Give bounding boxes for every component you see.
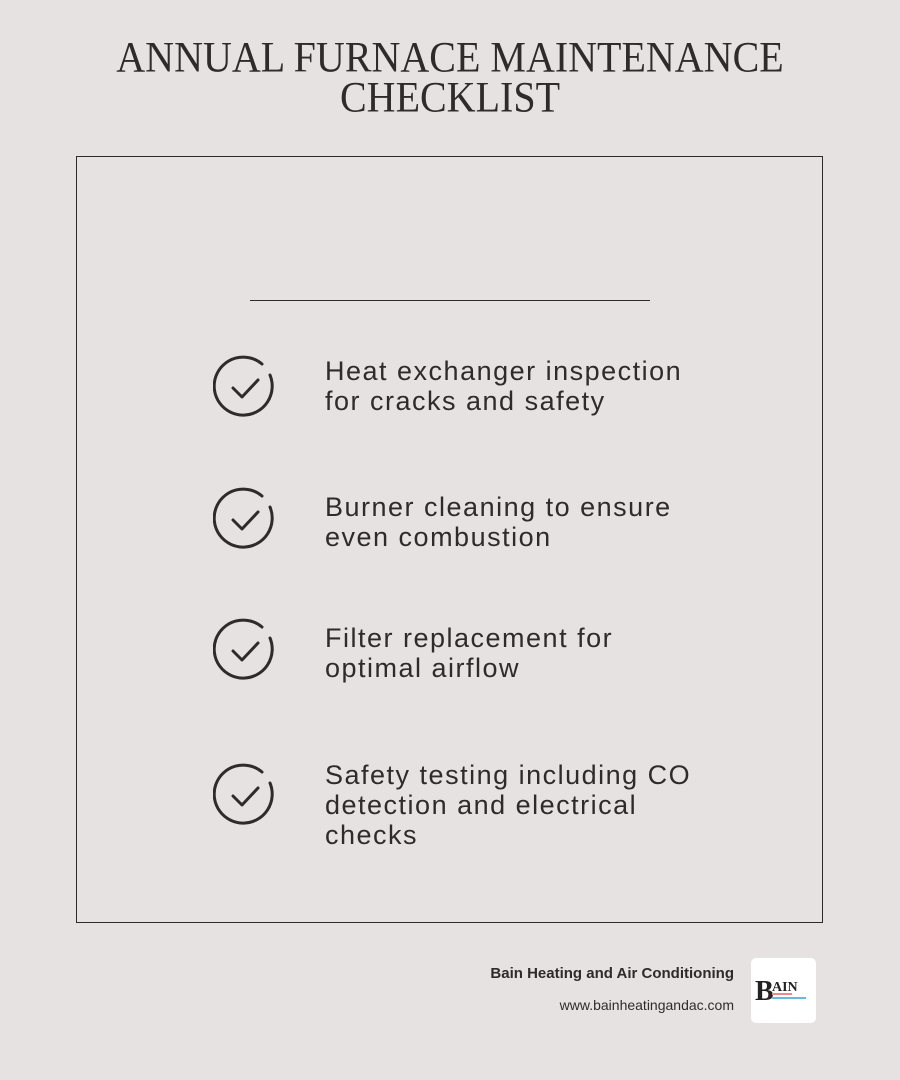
title: CHECKLIST <box>340 73 560 121</box>
item: filter: optimal airflow <box>325 653 520 683</box>
icon: check circle <box>213 488 274 549</box>
item: safety testing: checks <box>325 820 418 850</box>
item: heat exchanger <box>213 356 682 417</box>
brand name: Bain Heating and Air Conditioning <box>490 965 734 982</box>
panel: checklist <box>76 156 823 923</box>
logo: B <box>755 976 774 1007</box>
item: burner <box>213 488 672 552</box>
item: filter: Filter replacement for <box>325 623 613 653</box>
item: heat exchanger: for cracks and safety <box>325 386 606 416</box>
item: safety testing <box>213 760 691 850</box>
logo <box>751 958 816 1023</box>
icon: check circle <box>213 618 274 680</box>
item: burner: Burner cleaning to ensure <box>325 492 672 522</box>
website: www.bainheatingandac.com <box>560 997 734 1013</box>
item: safety testing: Safety testing including CO <box>325 760 691 790</box>
item: burner: even combustion <box>325 522 552 552</box>
item: filter <box>213 618 613 683</box>
title: ANNUAL FURNACE MAINTENANCE <box>116 33 784 81</box>
logo: AIN <box>772 980 798 995</box>
icon: check circle <box>213 764 274 825</box>
icon: check circle <box>213 356 274 417</box>
item: safety testing: detection and electrical <box>325 790 637 820</box>
title <box>116 33 784 121</box>
item: heat exchanger: Heat exchanger inspection <box>325 356 682 386</box>
